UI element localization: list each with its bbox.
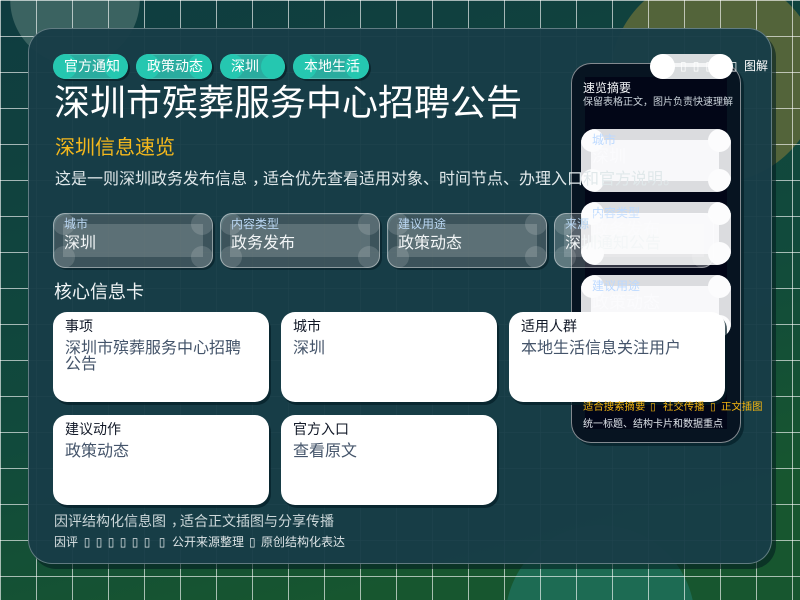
stat value: city: 深圳: [64, 235, 96, 252]
footer source name: 因评: [54, 535, 78, 549]
stat value: suggested use: 政策动态: [398, 235, 462, 252]
stat card: source: [554, 213, 714, 268]
footer placeholder glyphs: [84, 535, 165, 549]
side panel separator 2: ▯: [710, 402, 716, 413]
stat label: content type: 内容类型: [231, 217, 279, 231]
chip placeholder glyphs: ▯: [680, 59, 687, 73]
stat label: suggested use: 建议用途: [398, 217, 446, 231]
stat label: source: 来源: [565, 217, 589, 231]
side panel highlight text 2: 社交传播: [663, 402, 705, 413]
chip placeholder glyphs: ▯: [693, 59, 699, 73]
side panel note: 统一标题、结构卡片和数据重点: [583, 419, 723, 430]
tag shadow: official notice: [55, 56, 130, 81]
footer placeholder glyphs: ▯: [159, 535, 165, 549]
info card: item: 深圳市殡葬服务中心招聘公告: [65, 340, 241, 373]
side card label: suggested use: 建议用途: [592, 279, 640, 293]
white chip top right: [650, 54, 733, 79]
stat label: city: 城市: [64, 217, 88, 231]
tag text: policy news: 政策动态: [147, 58, 203, 74]
stat card: suggested use: [387, 213, 547, 268]
side panel heading: 速览摘要: [583, 81, 631, 95]
tag text: official notice: 官方通知: [64, 58, 120, 74]
chip placeholder glyphs: ▯: [705, 59, 712, 73]
tag text: local life: 本地生活: [304, 58, 360, 74]
footer placeholder glyphs: ▯: [84, 535, 90, 549]
side card: suggested use: [581, 275, 731, 338]
footer placeholder glyphs: ▯: [96, 535, 102, 549]
stat shadow 1: [55, 215, 215, 270]
footer original note: 原创结构化表达: [261, 535, 345, 549]
footer source note: 公开来源整理: [172, 535, 244, 549]
side card: content type: [581, 202, 731, 265]
footer separator: ▯: [249, 535, 256, 549]
info card: suggested action: 政策动态: [65, 443, 129, 460]
chip placeholder glyphs: [680, 59, 737, 73]
side card value: suggested use: 政策动态: [592, 293, 660, 312]
chip text: 图解: [744, 59, 768, 73]
info card: audience: [509, 312, 725, 402]
info card: audience: 适用人群: [521, 318, 577, 334]
subtitle: 深圳信息速览: [55, 137, 175, 159]
info card: city: 深圳: [293, 340, 325, 357]
side card: city: [581, 129, 731, 192]
side panel highlight text 3: 正文插图: [721, 402, 763, 413]
stat card: city: [53, 213, 213, 268]
chip placeholder glyphs: ▯: [718, 59, 725, 73]
title: 深圳市殡葬服务中心招聘公告: [54, 82, 522, 123]
footer placeholder glyphs: ▯: [132, 535, 138, 549]
side panel highlight text 1: 适合搜索摘要: [583, 402, 645, 413]
footer placeholder glyphs: ▯: [108, 535, 114, 549]
chip placeholder glyphs: ▯: [731, 59, 737, 73]
tag shadow: local life: [295, 56, 371, 81]
side panel description: 保留表格正文，图片负责快速理解: [583, 97, 733, 108]
info card: item: [53, 312, 269, 402]
tag: policy news: [136, 54, 212, 79]
tag shadow: shenzhen: [222, 56, 287, 81]
stat shadow 3: [389, 215, 549, 270]
info card: suggested action: [53, 415, 269, 505]
side panel separator 1: ▯: [650, 402, 656, 413]
info card: audience: 本地生活信息关注用户: [521, 340, 681, 357]
tag shadow: policy news: [138, 56, 214, 81]
tag: local life: [293, 54, 369, 79]
info card: official entry: 官方入口: [293, 421, 349, 437]
info card: city: 城市: [293, 318, 321, 334]
tag text: shenzhen: 深圳: [231, 58, 259, 74]
stat card: content type: [220, 213, 380, 268]
side summary panel: [571, 63, 741, 443]
stat value: content type: 政务发布: [231, 235, 295, 252]
stat shadow 2: [222, 215, 382, 270]
info card: official entry: [281, 415, 497, 505]
side card value: city: 深圳: [592, 147, 626, 166]
footer placeholder glyphs: ▯: [120, 535, 126, 549]
tag: official notice: [53, 54, 128, 79]
footer caption: 因评结构化信息图 ，适合正文插图与分享传播: [54, 513, 334, 529]
info card: official entry: 查看原文: [293, 443, 357, 460]
info card: item: 事项: [65, 318, 93, 334]
side card value: content type: 政务发布: [592, 220, 660, 239]
footer placeholder glyphs: ▯: [144, 535, 150, 549]
side card label: content type: 内容类型: [592, 206, 640, 220]
stat value: source: 深圳通知公告: [565, 235, 661, 252]
section heading: 核心信息卡: [54, 282, 144, 302]
info card: suggested action: 建议动作: [65, 421, 121, 437]
info card: city: [281, 312, 497, 402]
side card label: city: 城市: [592, 133, 616, 147]
tag: shenzhen: [220, 54, 285, 79]
intro text: 这是一则深圳政务发布信息 ，适合优先查看适用对象、时间节点、办理入口和官方说明。: [55, 171, 679, 188]
